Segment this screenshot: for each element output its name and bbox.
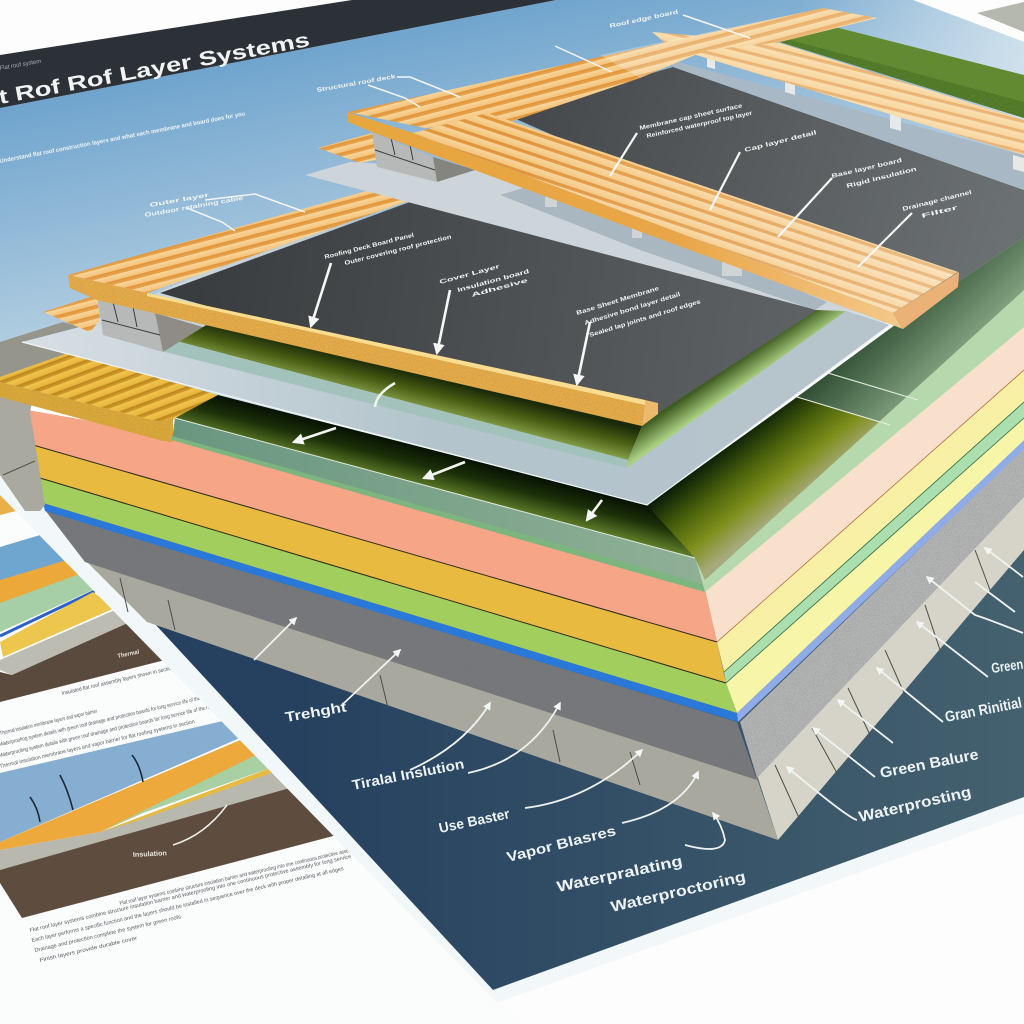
upper panel labels: Drainage channel	[902, 190, 973, 213]
green sheet	[172, 237, 1024, 592]
base labels: Waterprosting	[857, 783, 973, 826]
board lip	[165, 338, 628, 468]
corner of sheet behind, top right	[977, 2, 1024, 32]
concrete base right	[757, 495, 1024, 840]
lower panel labels: Adhesive bond layer detail	[584, 292, 682, 327]
header band	[0, 0, 556, 108]
callout: upper wood	[316, 74, 460, 107]
top strip fade	[600, 8, 877, 78]
blue membrane right	[737, 440, 1024, 722]
page text block middle	[0, 665, 215, 770]
base labels: Green Balure	[879, 746, 980, 782]
upper module	[305, 8, 1024, 329]
green sheet surface upper	[797, 237, 1024, 425]
page text block middle: Waterproofing system details with green roof drainage and protection boards for long service life of the roof	[0, 694, 210, 748]
upper panel labels: Reinforced waterproof top layer	[646, 111, 754, 140]
base arrows	[254, 548, 1023, 849]
lower module	[43, 188, 817, 520]
upper panel labels: Filter	[921, 205, 960, 220]
lower dark panel	[160, 202, 817, 426]
poster white border	[0, 470, 1024, 1003]
callout: lower wood: Outer layer	[149, 192, 211, 209]
page text block bottom	[29, 846, 359, 964]
lower wood edge highlight	[147, 293, 645, 405]
page text block bottom: Each layer performs a specific function and the layers should be installed in sequence over the deck with proper detailing at all edges	[31, 866, 344, 944]
base labels: Tiralal Inslution	[351, 755, 465, 793]
poster sky background	[0, 0, 1024, 420]
green sheet right lip	[695, 290, 1024, 592]
lower thumbnail diagram	[0, 720, 337, 918]
page text block bottom: Finish layers provide durable cover	[39, 936, 138, 964]
green sheet surface right	[647, 397, 890, 582]
board fade	[413, 113, 958, 313]
brackets right	[707, 55, 1024, 172]
upper panel labels	[639, 103, 973, 220]
green sheet surface left	[175, 395, 695, 558]
upper blue-grey sheet	[500, 185, 827, 310]
page text block middle: Waterproofing system details with green roof drainage and protection boards for long service life of the roof	[0, 704, 215, 759]
upper panel pointers	[610, 133, 912, 267]
grey membrane sheet	[22, 200, 890, 505]
board right strip	[627, 308, 850, 468]
lower panel labels: Roofing Deck Board Panel	[324, 233, 415, 261]
callout: upper wood: Structural roof deck	[316, 74, 397, 94]
callout: top strip	[555, 9, 750, 72]
base labels: Vapor Blasres	[505, 822, 618, 865]
diagonal board end	[893, 272, 959, 329]
lower bricks	[98, 298, 203, 352]
callout: top strip: Roof edge board	[609, 9, 679, 30]
salmon layer front	[27, 410, 717, 642]
header small caption: Flat roof system	[0, 59, 42, 72]
panel: back page with thumbnails	[0, 465, 520, 1024]
page text block middle: Insulated flat roof assembly layers shown in section	[61, 665, 175, 697]
upper panel labels: Cap layer detail	[744, 130, 818, 154]
lower panel labels: Cover Layer	[439, 264, 502, 286]
lower panel labels: Sealed lap joints and roof edges	[589, 299, 702, 339]
upper grey sheet	[305, 162, 893, 313]
left concrete block	[0, 322, 80, 511]
upper right wood	[652, 32, 1024, 155]
upper dark panel	[507, 67, 1024, 325]
title: t Rof Rof Layer Systems	[0, 29, 312, 109]
lime layer front	[40, 478, 737, 713]
poster navy base	[22, 480, 1024, 990]
lower panel labels: Outer covering roof protection	[344, 234, 453, 267]
mint layer right	[724, 402, 1024, 683]
bottom-left corrugated wood board	[0, 353, 218, 442]
upper panel labels: Base layer board	[831, 158, 903, 180]
lower panel labels	[324, 233, 702, 339]
lower panel labels: Base Sheet Membrane	[576, 286, 661, 317]
diagonal wood board	[413, 113, 958, 313]
base labels: Waterpralating	[555, 853, 684, 896]
base labels	[284, 656, 1024, 916]
pale yellow layer right	[717, 370, 1024, 672]
upper panel labels: Membrane cap sheet surface	[639, 103, 744, 132]
pale yellow right lower	[726, 418, 1024, 713]
gravel layer front	[45, 510, 757, 780]
board surface	[165, 202, 658, 460]
lower panel labels: Insulation board	[457, 269, 531, 294]
base labels: Waterproctoring	[609, 868, 747, 916]
callout: lower wood: Outdoor retaining cable	[144, 196, 245, 219]
yellow layer front	[33, 445, 726, 683]
board lip	[0, 382, 173, 442]
base labels: Trehght	[284, 698, 348, 725]
base labels: Use Baster	[437, 805, 512, 836]
subtitle: Understand flat roof construction layers and what each membrane and board does for you	[0, 111, 246, 165]
blue membrane front	[43, 503, 738, 722]
page text block bottom: Drainage and protection complete the system for green roofs	[34, 914, 182, 954]
top thumbnail diagram	[0, 490, 165, 702]
board top	[0, 353, 218, 422]
page text block middle: Thermal insulation membrane layers and vapor barrier	[0, 709, 98, 737]
concrete joints	[120, 550, 990, 820]
lower small wood	[43, 295, 100, 332]
brackets	[545, 197, 742, 276]
pale green board	[165, 202, 850, 468]
upper panel labels: Rigid insulation	[846, 167, 918, 190]
membrane bright edge	[22, 325, 890, 505]
peach layer right	[705, 325, 1024, 642]
right grey rail	[670, 60, 1024, 190]
top thumbnail diagram: Thermal	[117, 649, 140, 660]
diagonal board edge	[347, 112, 903, 329]
upper small wood	[318, 133, 376, 163]
page text block middle: Thermal insulation membrane layers and vapor barrier for flat roofing systems in section	[0, 719, 195, 770]
stacked roof layers	[27, 325, 1024, 840]
upper bricks	[372, 132, 475, 182]
page text block bottom: Flat roof layer systems combine structure insulation barrier and waterproofing into one continuous protective assembly for long service	[29, 854, 352, 934]
grass strip	[780, 25, 1024, 118]
lower thumbnail diagram: Insulation	[133, 850, 167, 859]
lower wood end	[642, 400, 658, 426]
gravel layer right	[740, 448, 1024, 778]
green sheet small arrows	[294, 383, 602, 520]
green sheet front lip	[172, 418, 705, 592]
sky right fade	[800, 0, 1024, 120]
lower panel labels: Adhesive	[471, 278, 530, 299]
page text block bottom: Flat roof layer systems combine structure insulation barrier and waterproofing into one continuous protective assembly	[119, 846, 359, 907]
concrete base front	[85, 560, 778, 840]
lower panel arrows	[311, 263, 590, 384]
top wood strip	[348, 8, 877, 128]
callout: lower wood	[144, 192, 305, 231]
lower wood edge	[68, 275, 645, 426]
green lip lower glow	[172, 436, 705, 592]
sky callouts and leaders	[144, 9, 750, 231]
lower wood strip	[68, 188, 411, 293]
